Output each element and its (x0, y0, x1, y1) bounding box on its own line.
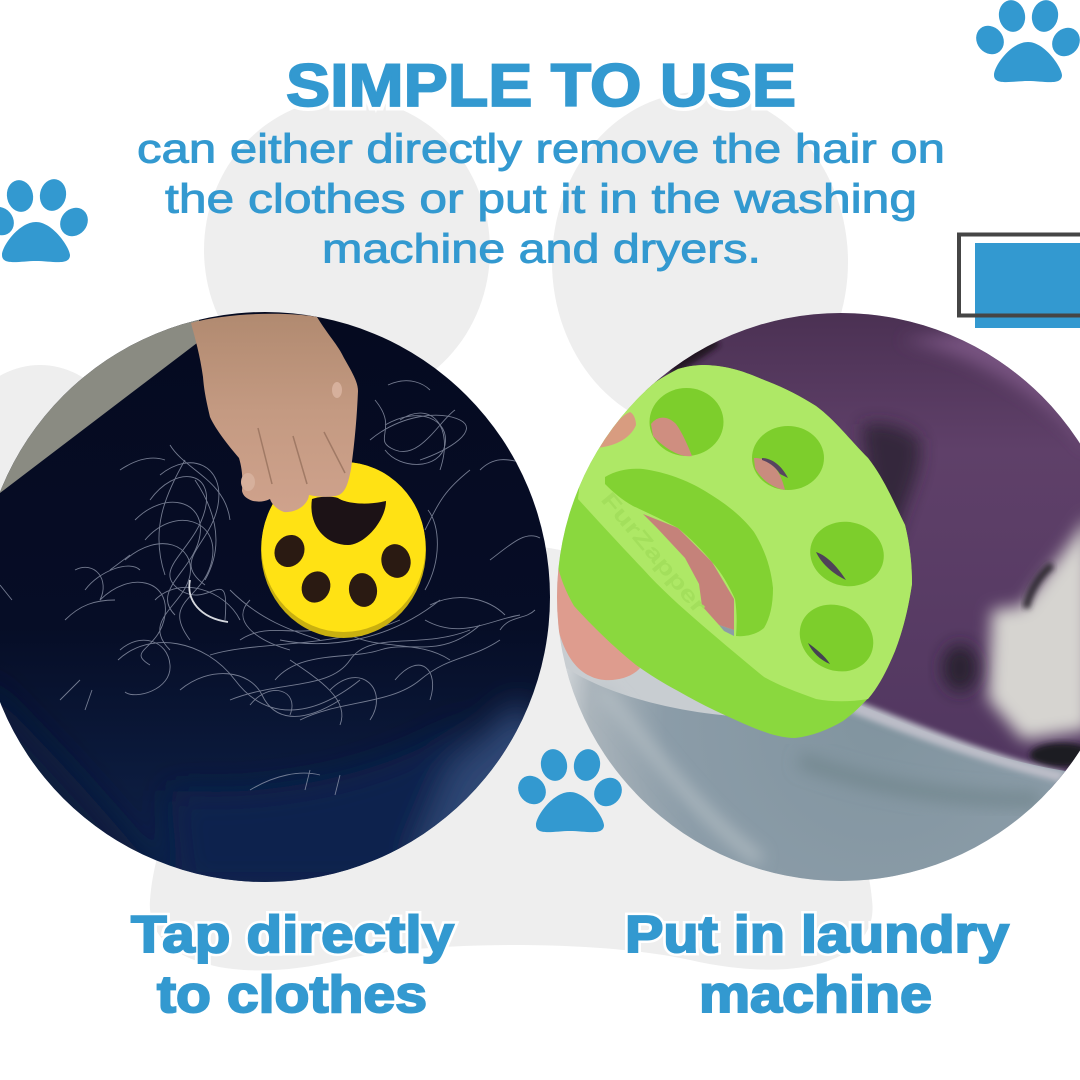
panel: left photo, tapping remover on clothes (0, 310, 565, 890)
watermark: large grey paw (0, 92, 873, 970)
title: SIMPLE TO USE (286, 52, 796, 119)
title: SIMPLE TO USE (286, 52, 796, 119)
fabric highlights (0, 693, 532, 882)
white laundry (942, 515, 1080, 767)
washer drum (568, 675, 1066, 881)
caption: tap directly to clothes (131, 906, 454, 1024)
bright hair curl (189, 580, 228, 622)
caption: tap directly to clothes: to clothes (157, 966, 427, 1024)
icon: paw top right (970, 0, 1080, 82)
caption: put in laundry machine (625, 906, 1009, 1024)
pet hair (0, 381, 540, 795)
icon: paw left (0, 177, 94, 262)
subtitle text: can either directly remove the hair on (137, 126, 945, 172)
grey sofa corner (0, 320, 200, 493)
subtitle text: the clothes or put it in the washing (165, 176, 917, 222)
icon: paw centre (512, 747, 628, 832)
subtitle text: machine and dryers. (322, 226, 761, 272)
caption: put in laundry machine: Put in laundry (625, 906, 1009, 964)
purple towel (640, 305, 1080, 790)
caption: put in laundry machine: machine (699, 966, 932, 1024)
caption: tap directly to clothes: to clothes (157, 966, 427, 1024)
panel: right photo, remover in laundry machine (545, 305, 1080, 895)
top face (578, 365, 912, 701)
hand behind the remover (557, 568, 640, 680)
caption: put in laundry machine: machine (699, 966, 932, 1024)
yellow paw remover (261, 462, 426, 638)
hand (191, 314, 358, 512)
green paw remover (557, 365, 912, 738)
fingertip over the remover (600, 412, 636, 448)
caption: put in laundry machine: Put in laundry (625, 906, 1009, 964)
embossed brand text: FurZapper (596, 487, 712, 619)
subtitle text (137, 126, 945, 272)
crescent slot with finger (643, 514, 734, 630)
caption: tap directly to clothes: Tap directly (131, 906, 454, 964)
caption: tap directly to clothes: Tap directly (131, 906, 454, 964)
decoration: blue rectangle with dark outline (959, 234, 1080, 328)
paw holes (650, 388, 724, 456)
